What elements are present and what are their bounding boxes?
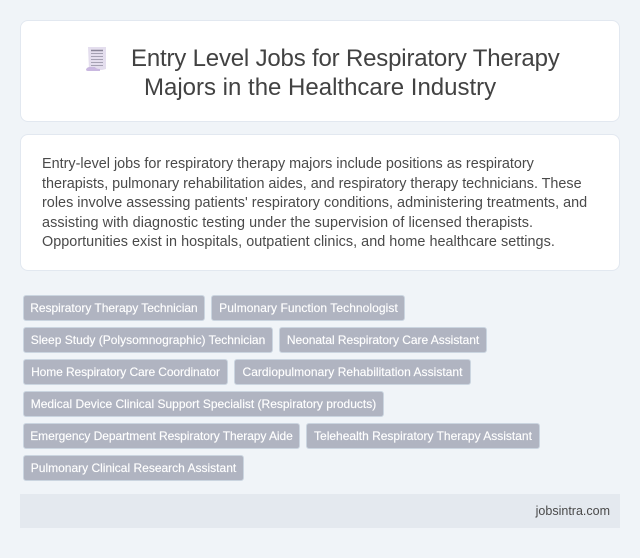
icon: scroll document [86,47,106,71]
tag [279,327,487,353]
title: Entry Level Jobs for Respiratory Therapy [131,45,560,72]
header card: Majors in the Healthcare Industry [144,74,496,101]
description text: Entry-level jobs for respiratory therapy majors include positions as respiratory [42,156,534,172]
tag: Home Respiratory Care Coordinator [31,365,220,379]
tag: Medical Device Clinical Support Specialist (Respiratory products) [31,397,376,411]
tag [23,455,244,481]
tag: Cardiopulmonary Rehabilitation Assistant [242,365,462,379]
tag [23,391,384,417]
tag [234,359,471,385]
description text: therapists, pulmonary rehabilitation aides, and respiratory therapy technicians. These [42,176,582,192]
description text [42,156,587,250]
tag: Pulmonary Function Technologist [219,301,398,315]
tag: Respiratory Therapy Technician [30,301,198,315]
job tags [23,295,540,481]
tag [23,327,273,353]
tag: Neonatal Respiratory Care Assistant [287,333,479,347]
tag [23,295,205,321]
tag: Sleep Study (Polysomnographic) Technician [31,333,265,347]
tag: Pulmonary Clinical Research Assistant [31,461,236,475]
header card [20,20,620,122]
description card [20,134,620,271]
footer site name: jobsintra.com [536,504,610,518]
tag [23,359,228,385]
tag: Telehealth Respiratory Therapy Assistant [314,429,532,443]
tag [23,423,300,449]
tag: Emergency Department Respiratory Therapy Aide [30,429,293,443]
description text: roles involve assessing patients' respiratory conditions, administering treatments, and [42,195,587,211]
tag [211,295,405,321]
description text: Opportunities exist in hospitals, outpatient clinics, and home healthcare settings. [42,234,555,250]
tag [306,423,540,449]
footer [20,494,620,528]
description text: assisting with diagnostic testing under the supervision of licensed therapists. [42,215,533,231]
